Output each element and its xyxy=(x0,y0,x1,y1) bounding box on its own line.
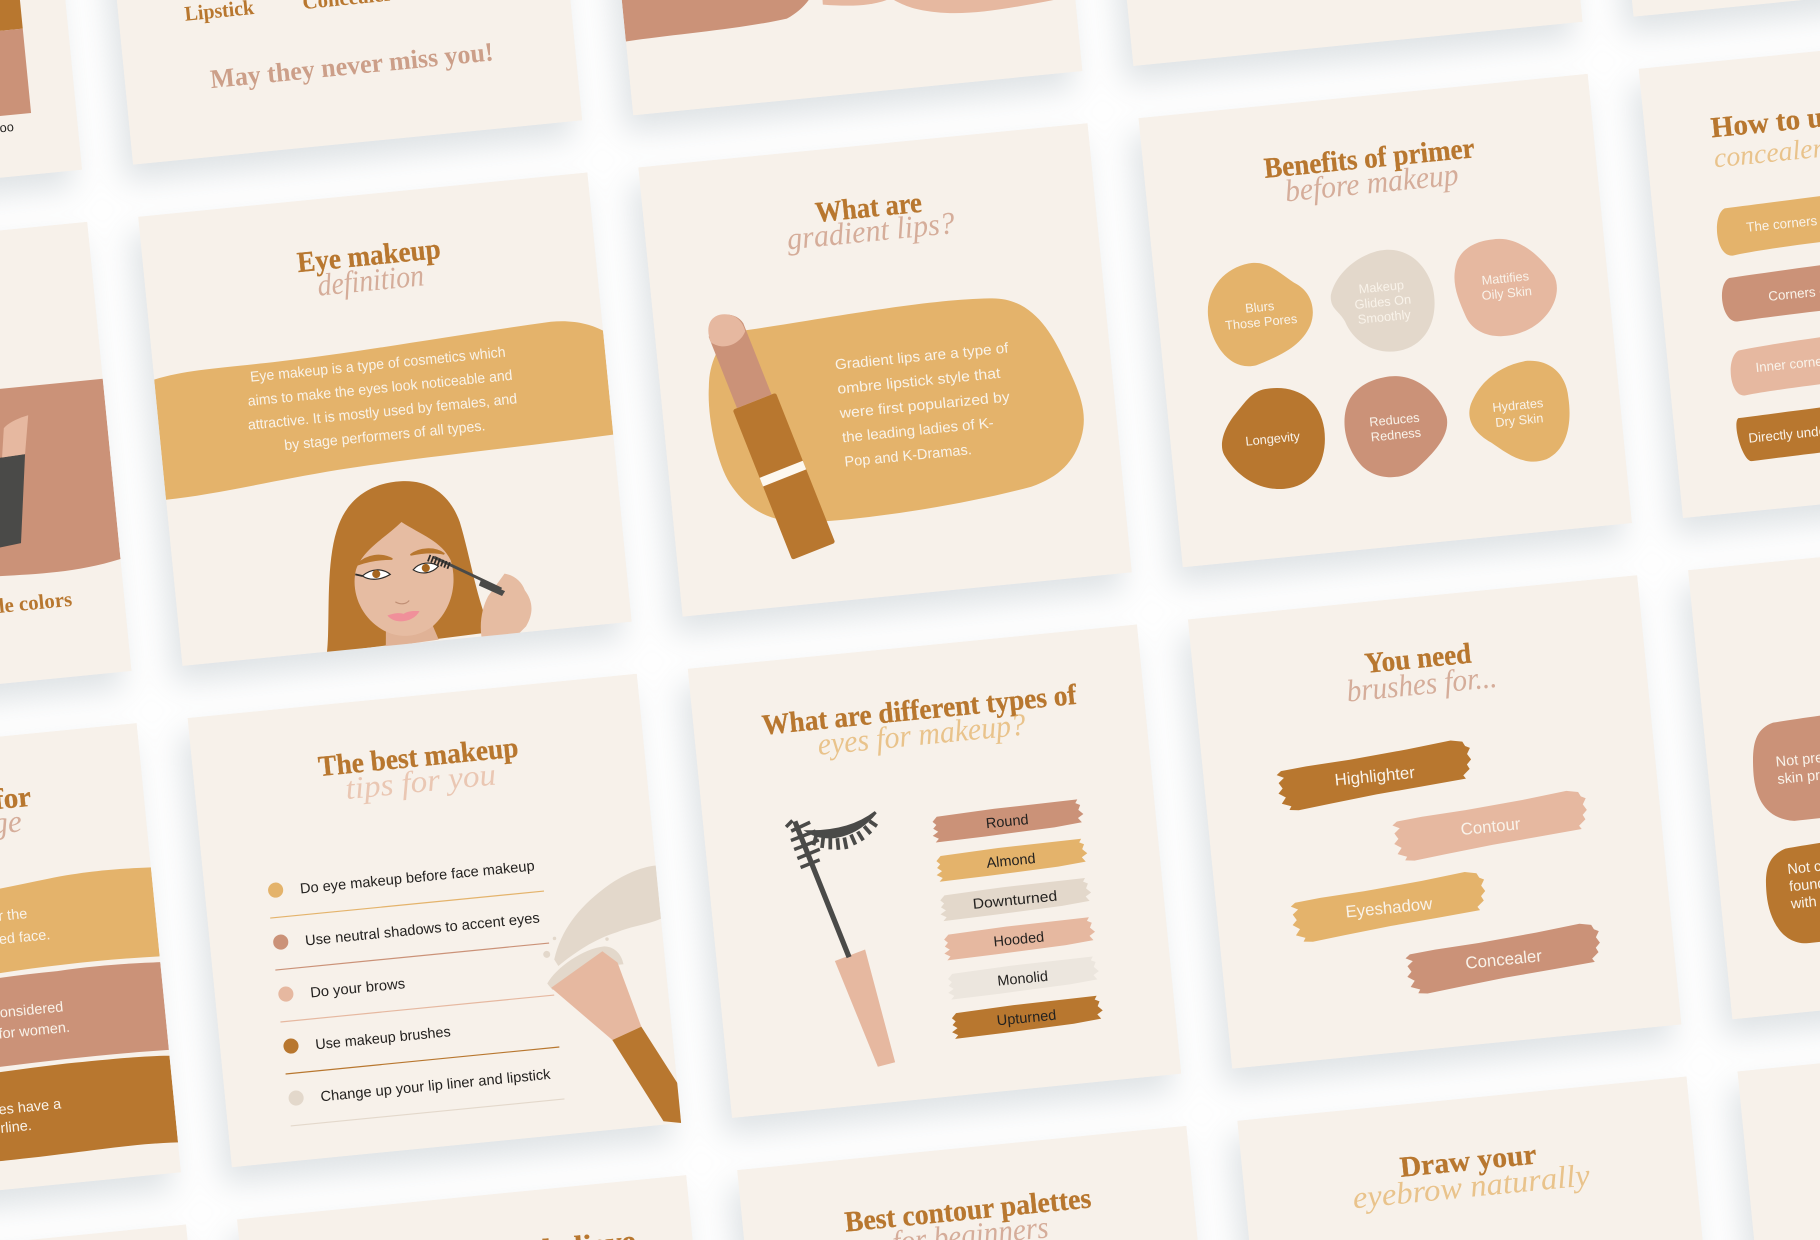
blob: blurs pores: Blurs xyxy=(1244,298,1275,316)
blob: glides on xyxy=(1330,250,1434,352)
panel: blank slide bottom edge xyxy=(1089,0,1583,66)
panel: cropped slide top left xyxy=(0,0,82,178)
list item 5 xyxy=(287,1064,564,1126)
list item 1: Do eye makeup before face makeup xyxy=(299,858,535,897)
panel: you need brushes for xyxy=(1188,575,1681,1069)
heading xyxy=(1342,635,1498,709)
stroke: highlighter: Highlighter xyxy=(1334,763,1416,790)
blob: blurs pores xyxy=(1208,262,1313,366)
colour bands xyxy=(0,0,32,116)
blob: hydrates xyxy=(1469,360,1570,462)
stroke: contour: Contour xyxy=(1460,814,1522,839)
panel: makeup tips cropped left xyxy=(0,723,181,1217)
body text: were first popularized by xyxy=(838,389,1011,422)
list item 4 xyxy=(282,1012,559,1074)
blob: mattifies: Oily Skin xyxy=(1481,283,1532,303)
panel: eye makeup definition xyxy=(138,172,632,668)
blob: longevity xyxy=(1222,388,1325,489)
heading xyxy=(296,242,440,300)
bar: the corners xyxy=(1716,196,1820,256)
list item 1 xyxy=(267,856,544,918)
illustration: mascara and lashes xyxy=(786,812,900,1073)
heading xyxy=(1349,1134,1591,1215)
blob: glides on: Smoothly xyxy=(1357,307,1412,327)
illustration: makeup brush xyxy=(536,865,682,1135)
blob: reduces redness: Redness xyxy=(1370,425,1422,445)
blob: not choosing foundation xyxy=(1762,808,1820,947)
tag: round xyxy=(931,799,1085,843)
bar: inner corners xyxy=(1730,337,1820,396)
blob: reduces redness: Reduces xyxy=(1369,410,1420,430)
definition text: Eye makeup is a type of cosmetics which xyxy=(249,345,506,386)
bar: corners xyxy=(1722,265,1820,322)
list item 3: Do your brows xyxy=(310,976,406,1001)
panel: makeup myths cropped by page bottom xyxy=(237,1175,731,1240)
definition text: aims to make the eyes look noticeable and xyxy=(247,368,513,410)
list item 5: Change up your lip liner and lipstick xyxy=(320,1067,552,1105)
blob: reduces redness xyxy=(1344,376,1448,478)
blob: hydrates: Hydrates xyxy=(1492,395,1544,415)
lips illustration xyxy=(622,0,1054,42)
heading xyxy=(761,679,1081,767)
panel: not prepping skin, cropped right xyxy=(1688,526,1820,1019)
body text: ombre lipstick style that xyxy=(837,366,1001,398)
tag: upturned: Upturned xyxy=(996,1008,1057,1029)
tag: almond xyxy=(934,838,1089,882)
list item 2: Use neutral shadows to accent eyes xyxy=(304,910,540,949)
band: gold xyxy=(0,866,162,1019)
tag: monolid: Monolid xyxy=(997,969,1049,990)
list item 3 xyxy=(277,960,554,1022)
closing line: May they never miss you! xyxy=(209,36,495,94)
body text xyxy=(833,340,1020,471)
body text: the leading ladies of K- xyxy=(841,415,995,446)
panel: blank slide top right xyxy=(1632,0,1800,16)
stroke: concealer: Concealer xyxy=(1465,946,1543,973)
heading: Benefits of primer xyxy=(1263,132,1476,185)
heading: Eye makeup xyxy=(296,233,442,279)
stroke: eyeshadow xyxy=(1289,870,1489,944)
body text: Gradient lips are a type of xyxy=(834,340,1010,374)
blob: glides on: Glides On xyxy=(1354,292,1412,312)
panel: draw your eyebrow naturally xyxy=(1237,1076,1731,1240)
tag: almond: Almond xyxy=(986,851,1036,872)
heading: before makeup xyxy=(1283,157,1460,208)
heading: You need xyxy=(1363,638,1473,680)
blob: not preparing xyxy=(1748,683,1820,824)
list item 2 xyxy=(272,908,549,970)
heading xyxy=(317,732,522,809)
blob: blurs pores: Those Pores xyxy=(1224,311,1298,333)
stroke: contour xyxy=(1391,789,1590,862)
blob: glides on: Makeup xyxy=(1358,277,1405,296)
heading xyxy=(1710,113,1820,168)
panel: gradient lips xyxy=(638,123,1132,617)
panel: the best makeup tips xyxy=(188,674,682,1167)
heading: What are xyxy=(814,187,923,229)
tag: hooded: Hooded xyxy=(993,930,1045,950)
heading xyxy=(1263,142,1474,206)
heading: tips for you xyxy=(344,756,497,806)
panel: how to use concealer xyxy=(1639,24,1820,518)
blob: mattifies xyxy=(1454,238,1557,336)
stroke: concealer xyxy=(1404,922,1603,995)
heading: gradient lips? xyxy=(785,205,957,256)
band: brown xyxy=(0,1053,179,1198)
bar: directly under xyxy=(1736,408,1820,462)
stroke: highlighter xyxy=(1275,739,1474,812)
heading: The best makeup xyxy=(317,732,520,783)
panel: may they never miss you xyxy=(89,0,582,165)
panel: pale colors slide xyxy=(0,222,132,715)
heading: eyebrow naturally xyxy=(1351,1157,1591,1215)
tag: monolid xyxy=(946,956,1100,1000)
stroke: eyeshadow: Eyeshadow xyxy=(1345,894,1434,922)
blob: longevity: Longevity xyxy=(1245,428,1301,449)
tag: hooded xyxy=(942,917,1096,961)
illustration: woman applying mascara xyxy=(327,481,532,652)
heading xyxy=(0,781,35,857)
blob: mattifies: Mattifies xyxy=(1481,268,1530,288)
definition text xyxy=(242,344,520,457)
tag: upturned xyxy=(950,995,1104,1039)
panel: types of eyes xyxy=(688,624,1181,1118)
list item 4: Use makeup brushes xyxy=(315,1024,451,1053)
band: rose xyxy=(0,960,170,1105)
heading: eyes for makeup? xyxy=(816,707,1028,762)
gold wave band xyxy=(152,317,615,500)
heading: Draw your xyxy=(1398,1139,1538,1184)
panel: lips illustration slide xyxy=(589,0,1082,115)
definition text: by stage performers of all types. xyxy=(284,418,486,454)
lipstick illustration xyxy=(0,415,28,548)
panel: blank slide bottom left xyxy=(0,1224,230,1240)
panel: benefits of primer xyxy=(1138,74,1632,567)
heading: Best contour palettes xyxy=(843,1182,1093,1239)
tag: downturned: Downturned xyxy=(972,889,1058,913)
blob: hydrates: Dry Skin xyxy=(1495,410,1544,430)
tag: downturned xyxy=(938,878,1092,921)
heading: brushes for... xyxy=(1345,659,1498,709)
definition text: attractive. It is mostly used by females, and xyxy=(247,391,518,434)
tag: round: Round xyxy=(985,812,1029,832)
panel: blank slide bottom right xyxy=(1737,1027,1820,1240)
illustration: lipstick xyxy=(708,314,835,560)
heading: What are different types of xyxy=(761,679,1078,742)
rose backdrop xyxy=(0,378,120,576)
panel: best contour palettes xyxy=(737,1126,1231,1240)
gold blob xyxy=(708,298,1084,522)
body text: Pop and K-Dramas. xyxy=(844,442,972,471)
heading: definition xyxy=(316,257,425,303)
